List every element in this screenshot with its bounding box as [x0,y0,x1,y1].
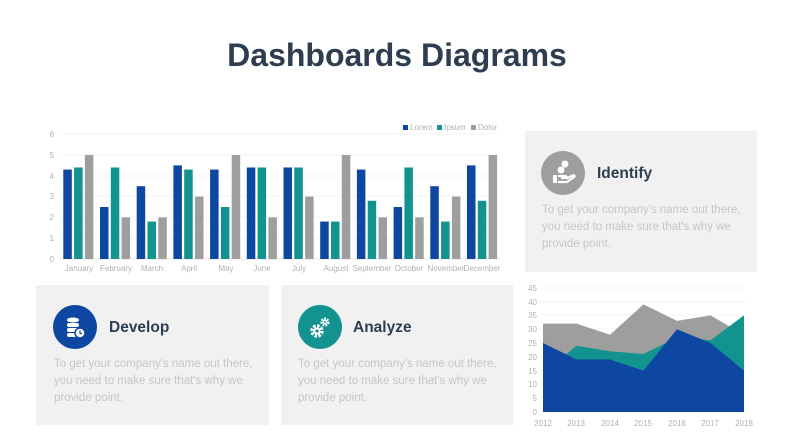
bar chart: September [352,264,392,273]
bar chart: 0 [50,255,55,264]
area chart: 2012 [534,419,552,428]
bar chart: July [292,264,306,273]
bar chart: December [464,264,501,273]
text block: To get your company's name out there, you need to make sure that's why we provide point. [298,358,496,404]
panel: identify [525,131,757,272]
bar chart: January [65,264,93,273]
bar chart: 6 [50,130,55,139]
area chart: 2015 [634,419,652,428]
heading: Develop [109,319,169,336]
heading: Analyze [353,319,412,336]
bar chart: February [100,264,132,273]
bar chart: March [141,264,163,273]
area chart: 2017 [701,419,719,428]
legend: Ipsum [444,123,466,132]
bar chart: 5 [50,151,55,160]
area chart: 5 [533,394,538,403]
bar chart: August [324,264,349,273]
area chart: 15 [528,367,538,376]
area chart: 35 [528,311,538,320]
area chart: 0 [533,408,538,417]
bar chart: November [428,264,465,273]
area chart: 20 [528,353,538,362]
text block: To get your company's name out there, you need to make sure that's why we provide point. [54,358,252,404]
area chart: 45 [528,284,538,293]
icon: gears [298,305,342,349]
area chart: 25 [528,339,538,348]
bar chart: 4 [50,172,55,181]
bar chart: May [218,264,234,273]
text block: To get your company's name out there, you need to make sure that's why we provide point. [542,204,740,250]
bar chart: 3 [50,192,55,201]
panel: analyze [281,285,513,425]
heading: Identify [597,165,652,182]
bar chart [50,123,501,273]
area chart: 2013 [567,419,585,428]
icon: database clock [53,305,97,349]
legend: Dolor [478,123,497,132]
bar chart: 1 [50,234,55,243]
bar chart: April [181,264,197,273]
legend: Lorem [410,123,433,132]
area chart: 40 [528,298,538,307]
bar chart: October [395,264,424,273]
area chart: 2018 [735,419,753,428]
area chart [528,284,753,428]
panel: develop [36,285,269,425]
legend [403,123,497,132]
bar chart: 2 [50,213,55,222]
title: Dashboards Diagrams [227,37,567,73]
bar chart: June [253,264,271,273]
area chart: 10 [528,380,538,389]
area chart: 2016 [668,419,686,428]
icon: hand with coins [541,151,585,195]
area chart: 2014 [601,419,619,428]
area chart: 30 [528,325,538,334]
